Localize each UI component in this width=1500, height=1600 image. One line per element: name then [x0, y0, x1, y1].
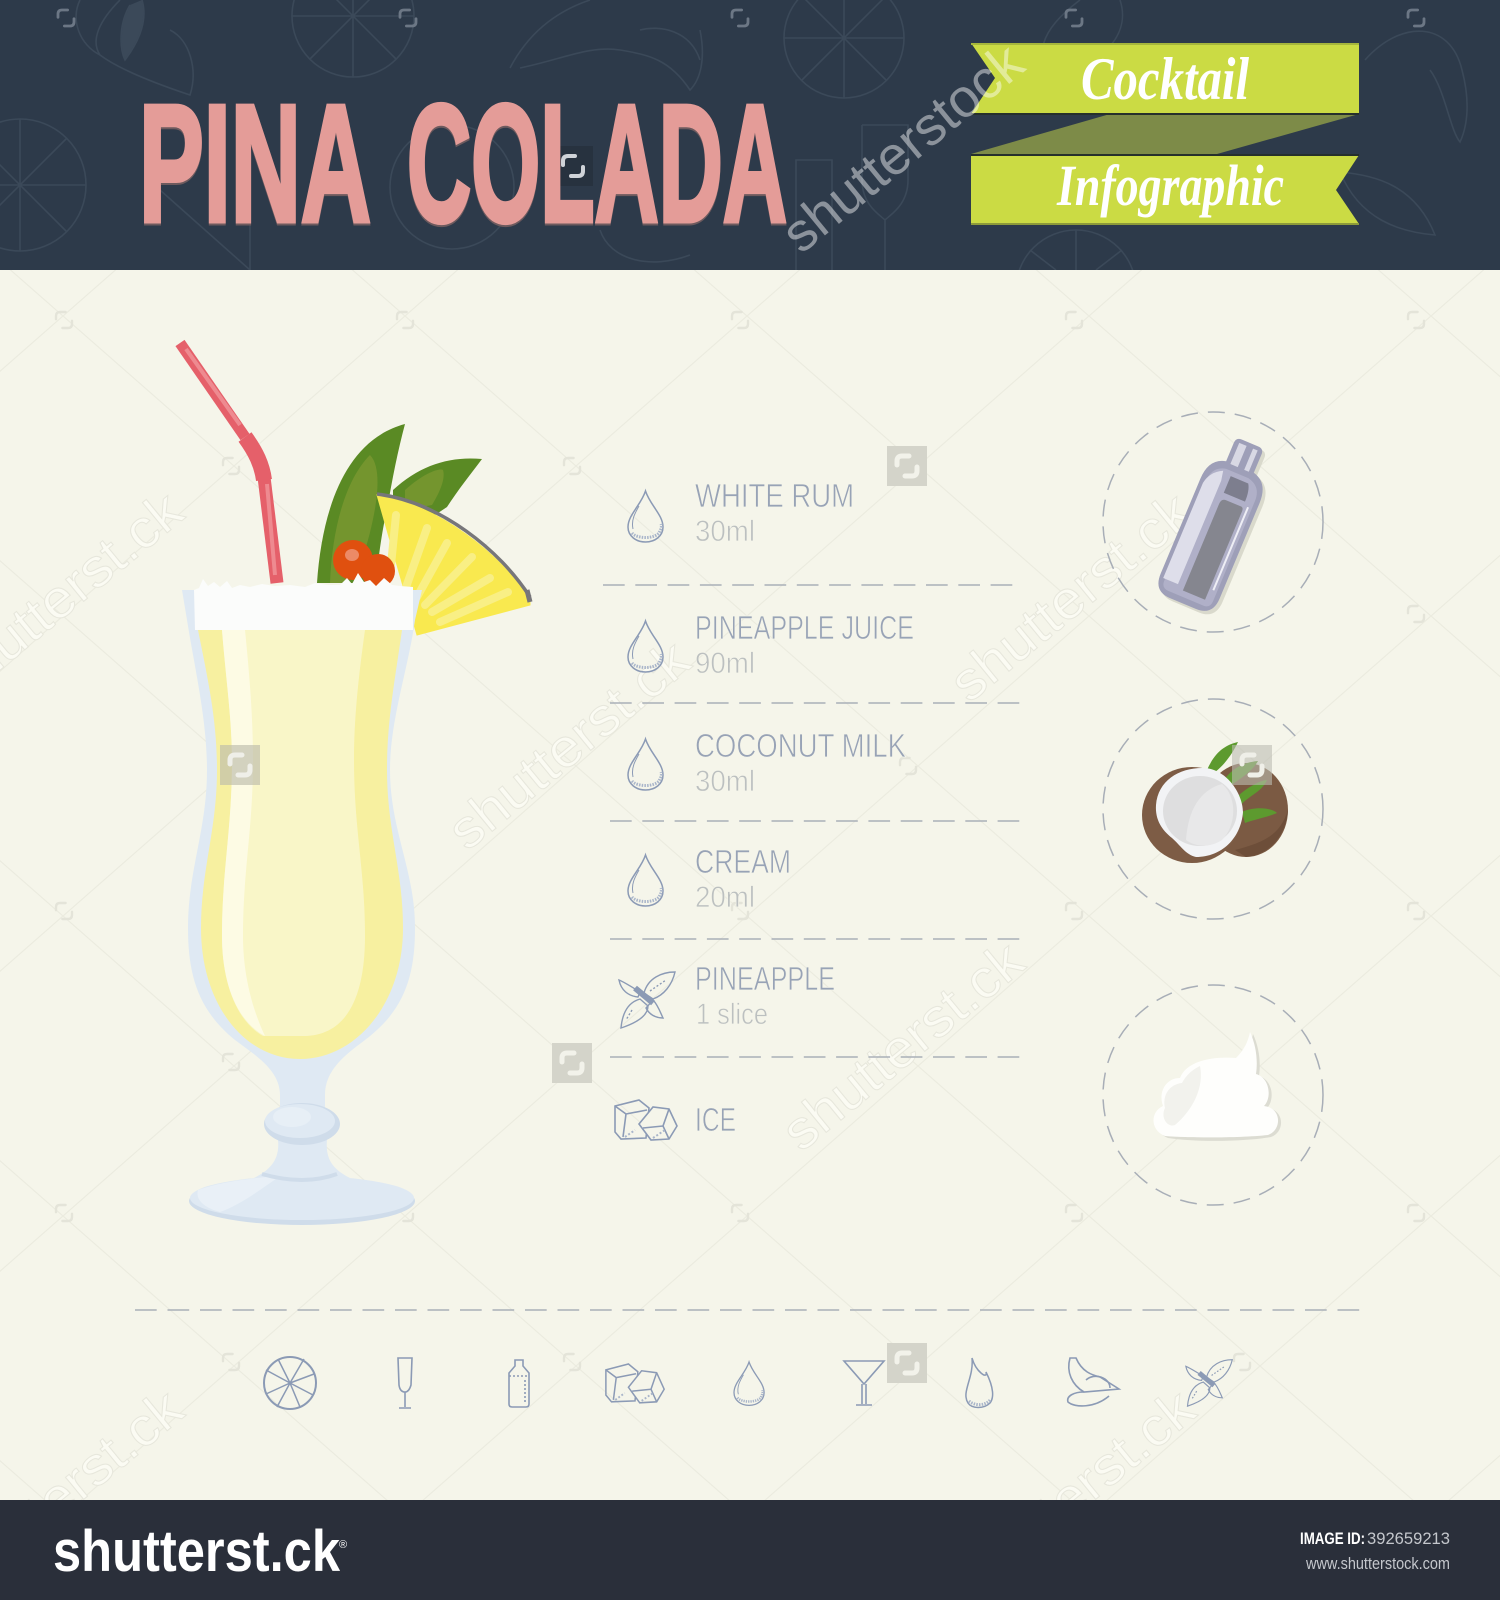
- ingredient: white rum: 30ml: [695, 515, 755, 548]
- watermark texts: shutterst.ck: [437, 628, 702, 861]
- icon: mint leaf: [1186, 1360, 1232, 1406]
- title: COLADA: [407, 71, 787, 257]
- icon: small shaker: [509, 1360, 529, 1407]
- separators: [603, 585, 1023, 1057]
- footer: [0, 1500, 1500, 1600]
- pineapple slice: [377, 494, 530, 635]
- header band: [0, 0, 1500, 270]
- glass foot: [189, 1174, 415, 1225]
- ingredient: pineapple: PINEAPPLE: [695, 960, 835, 997]
- ingredient: cream: [628, 843, 791, 914]
- ingredient: pineapple: 1 slice: [696, 998, 768, 1031]
- foam: [194, 573, 413, 630]
- ingredient: cream: 20ml: [695, 881, 755, 914]
- icon: banana: [1068, 1358, 1119, 1406]
- ingredient: pineapple juice: 90ml: [695, 647, 755, 680]
- ingredient: cream: CREAM: [695, 843, 791, 880]
- panel: coconut circle: [1103, 699, 1323, 919]
- icon: coconut: [1142, 742, 1288, 863]
- header watermark: shutterstock: [771, 31, 1036, 264]
- liquid highlight: [222, 630, 365, 1036]
- icon: drop: [734, 1362, 764, 1405]
- icon: flute: [398, 1358, 412, 1408]
- ingredient list: [603, 477, 1023, 1140]
- cocktail liquid: [198, 630, 403, 1059]
- ingredient: coconut milk: 30ml: [695, 765, 755, 798]
- icon: shaker: [1153, 431, 1283, 619]
- site url: www.shutterstock.com: [1305, 1554, 1450, 1573]
- watermark texts: [0, 479, 1207, 1600]
- image id: IMAGE ID:: [1300, 1529, 1365, 1548]
- bottom divider: [135, 1309, 1360, 1311]
- watermark marks: [56, 312, 1424, 1370]
- glass stem: [254, 1140, 350, 1178]
- ingredient: pineapple juice: [628, 609, 914, 680]
- glass body: [182, 590, 422, 1110]
- ingredient: pineapple juice: PINEAPPLE JUICE: [695, 609, 914, 646]
- watermark texts: shutterst.ck: [771, 929, 1036, 1162]
- panel: shaker circle: [1103, 412, 1323, 632]
- title: PINA: [139, 71, 371, 257]
- watermark lattice: [0, 270, 1500, 1500]
- panel: cream circle: [1103, 985, 1323, 1205]
- icon: whipped cream: [1153, 1032, 1281, 1141]
- icon: flame: [966, 1358, 993, 1408]
- icon: ice cubes: [606, 1364, 664, 1403]
- watermark texts: shutterst.ck: [939, 480, 1204, 713]
- ingredient: coconut milk: COCONUT MILK: [695, 727, 906, 764]
- title: [139, 71, 787, 257]
- icon row: [264, 1357, 1232, 1409]
- icon: citrus: [264, 1357, 316, 1409]
- ribbon text: Infographic: Infographic: [1056, 153, 1284, 218]
- ingredient: ice: ICE: [695, 1101, 736, 1138]
- glass knob: [264, 1103, 340, 1145]
- ingredient: white rum: [628, 477, 854, 548]
- ingredient: coconut milk: [628, 727, 906, 798]
- cherry: [333, 540, 395, 588]
- footer: ®: [339, 1539, 347, 1551]
- cocktail glass illustration: [180, 343, 530, 1225]
- ribbon text: Cocktail: Cocktail: [1081, 46, 1249, 112]
- ingredient: white rum: WHITE RUM: [695, 477, 854, 514]
- straw: [180, 343, 277, 583]
- footer: 392659213: [1367, 1529, 1450, 1548]
- ingredient: pineapple: [619, 960, 835, 1031]
- icon: martini glass: [844, 1361, 884, 1405]
- footer logo: shutterst.ck: [53, 1519, 341, 1584]
- leaves: [317, 424, 482, 583]
- header doodle pattern: [0, 0, 1468, 270]
- ingredient: ice: [615, 1100, 736, 1140]
- ribbon: [971, 43, 1359, 225]
- liquid shine: [222, 630, 265, 1036]
